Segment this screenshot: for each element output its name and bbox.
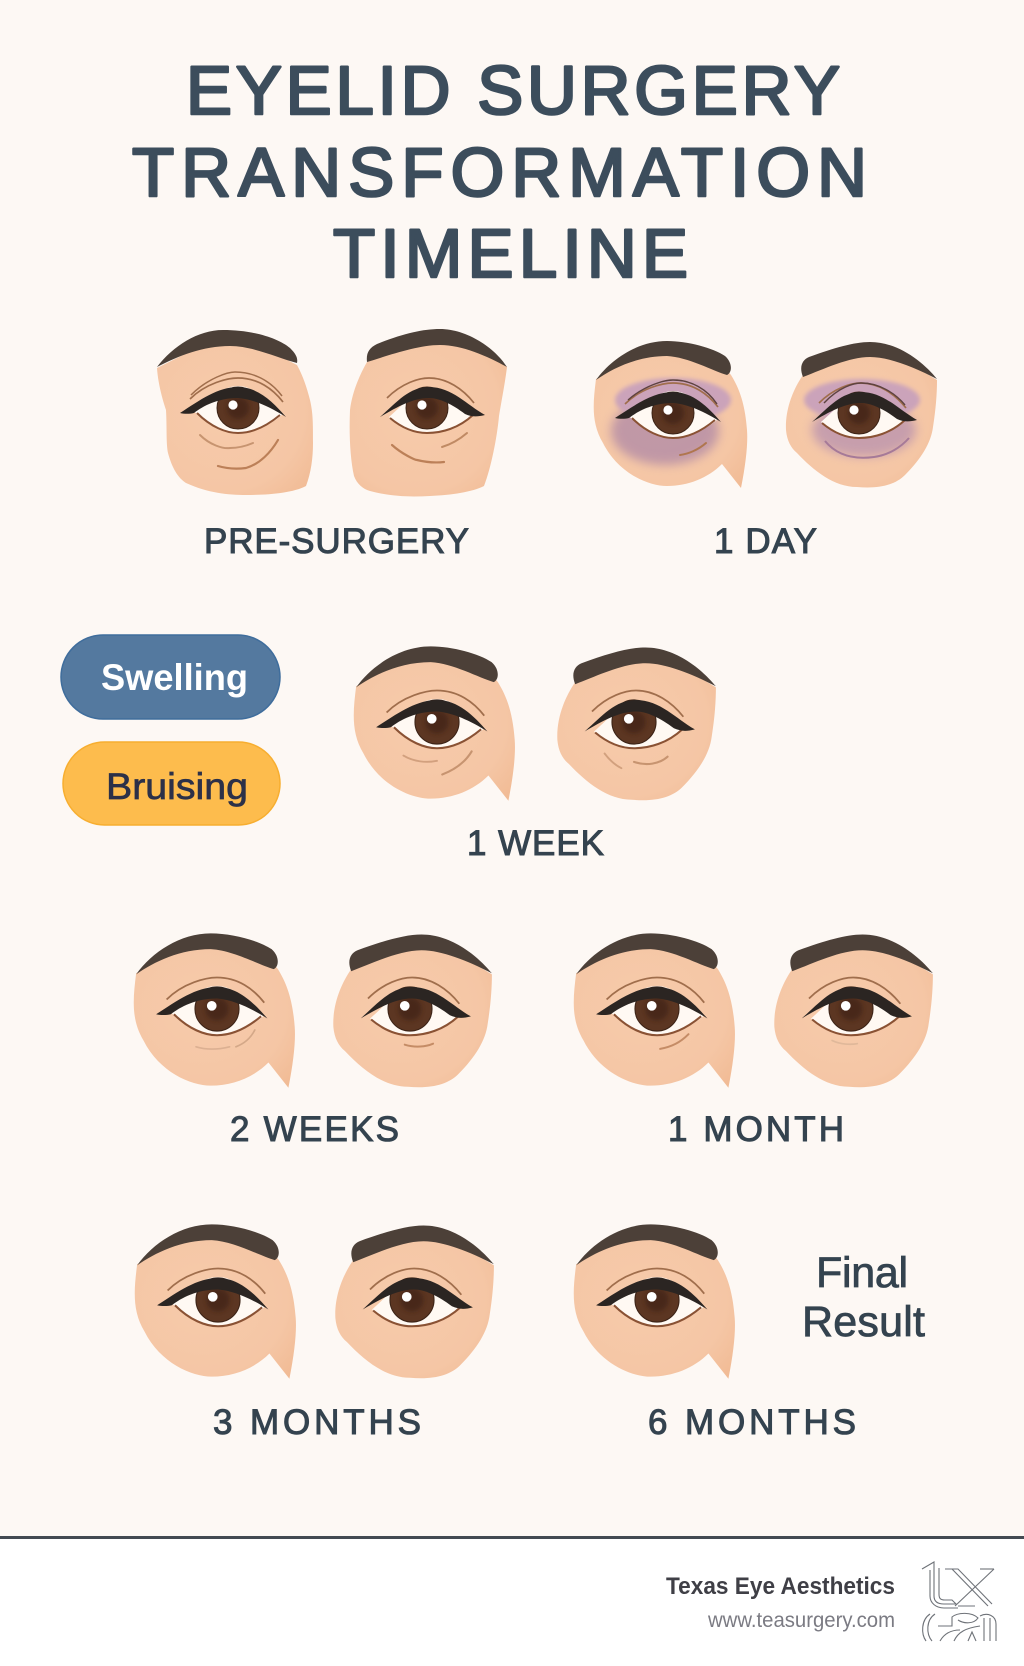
label: 2 weeks: 2 WEEKS bbox=[230, 1110, 399, 1149]
icon: 1 day left eye with bruising bbox=[594, 341, 747, 488]
footer bbox=[0, 1536, 1024, 1666]
panel: 1 month bbox=[574, 933, 933, 1149]
icon: 1 day right eye with bruising bbox=[786, 342, 937, 488]
title: TRANSFORMATION bbox=[132, 134, 867, 211]
legend pill: bruising: Bruising bbox=[106, 766, 248, 807]
panel: 1 day bbox=[594, 341, 937, 561]
panel: pre-surgery bbox=[157, 329, 507, 561]
title: TIMELINE bbox=[333, 215, 688, 292]
footer: website: www.teasurgery.com bbox=[707, 1609, 895, 1632]
panel: 3 months bbox=[135, 1224, 494, 1442]
callout: final result: Result bbox=[802, 1298, 925, 1346]
icon: logo monogram bbox=[922, 1562, 996, 1641]
label: 1 month: 1 MONTH bbox=[668, 1110, 844, 1149]
icon: 1 week right eye bbox=[557, 647, 716, 800]
footer: brand name: Texas Eye Aesthetics bbox=[666, 1573, 895, 1600]
callout: final result: Final bbox=[816, 1249, 908, 1297]
icon: 3 months left eye bbox=[135, 1224, 296, 1379]
label: 3 months: 3 MONTHS bbox=[213, 1403, 421, 1442]
icon: 1 month left eye bbox=[574, 933, 735, 1088]
legend pill: swelling: Swelling bbox=[101, 657, 248, 698]
label: 1 week: 1 WEEK bbox=[467, 824, 604, 863]
title: EYELID SURGERY bbox=[186, 52, 840, 129]
callout: final result bbox=[802, 1249, 925, 1346]
icon: 2 weeks left eye bbox=[134, 933, 295, 1088]
panel: 6 months bbox=[574, 1224, 925, 1442]
panel: 2 weeks bbox=[134, 933, 492, 1149]
icon: pre-surgery left eye bbox=[157, 330, 313, 495]
label: 1 day: 1 DAY bbox=[714, 522, 817, 561]
legend pill: bruising bbox=[63, 742, 280, 825]
icon: 6 months eye bbox=[574, 1224, 735, 1379]
label: 6 months: 6 MONTHS bbox=[648, 1403, 856, 1442]
legend pill: swelling bbox=[61, 635, 280, 719]
icon: 1 month right eye bbox=[774, 934, 933, 1087]
icon: pre-surgery right eye bbox=[350, 329, 507, 496]
title bbox=[132, 52, 867, 292]
panel: 1 week bbox=[354, 646, 716, 863]
label: pre-surgery: PRE-SURGERY bbox=[204, 522, 469, 561]
icon: 1 week left eye bbox=[354, 646, 515, 801]
icon: 2 weeks right eye bbox=[333, 934, 492, 1087]
icon: 3 months right eye bbox=[335, 1225, 494, 1378]
